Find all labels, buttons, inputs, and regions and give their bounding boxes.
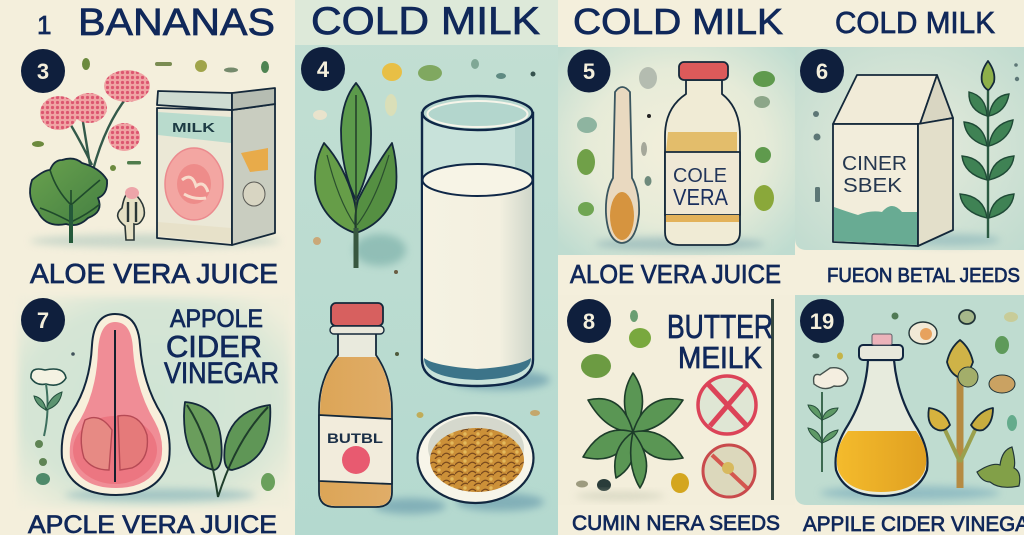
ground shadow	[820, 486, 1000, 500]
heading: cold milk column 3: COLD MILK	[573, 1, 783, 42]
icon: milk box: MILK	[172, 120, 216, 135]
heading: cold milk centre: COLD MILK	[311, 0, 540, 43]
icon: scattered specks	[32, 58, 269, 171]
panel: guava and leaves	[31, 314, 275, 501]
panel: herb and prohibition signs	[575, 299, 773, 500]
panel backdrop: apple cider lower left	[18, 297, 290, 507]
icon: vinegar flask	[836, 334, 928, 496]
badge: 19	[800, 299, 844, 343]
heading: apple cider vinegar: CIDER	[166, 329, 262, 364]
heading: bananas: 1	[37, 10, 51, 40]
icon: wooden spoon	[606, 87, 639, 243]
icon: scattered specks	[313, 59, 540, 418]
badge: 4	[301, 47, 345, 91]
badge: 3: 3	[37, 59, 49, 84]
heading: butter milk	[667, 308, 773, 375]
panel: milk carton and plant	[813, 61, 1019, 246]
icon: specks	[575, 310, 689, 500]
icon: milk carton: SBEK	[843, 175, 903, 197]
caption: cumin nera seeds: CUMIN NERA SEEDS	[572, 512, 780, 535]
panel backdrop: flask lower right	[795, 295, 1024, 505]
ground shadow	[30, 234, 280, 248]
panel backdrop: column 3 top	[558, 47, 795, 255]
badge: 7: 7	[37, 308, 49, 333]
icon: aloe bottle: COLE	[673, 165, 727, 187]
panel: spoon and aloe bottle	[577, 62, 775, 251]
badge: 6: 6	[816, 59, 828, 84]
ground shadow	[595, 237, 765, 251]
icon: small white flower sprig	[31, 369, 66, 436]
badge: 6	[800, 49, 844, 93]
heading: apple cider vinegar	[164, 305, 279, 390]
heading: bananas: BANANAS	[78, 2, 275, 44]
badge: 8	[567, 299, 611, 343]
icon: specks	[35, 352, 275, 491]
badge: 8: 8	[583, 309, 595, 334]
heading: cold milk column 4: COLD MILK	[835, 5, 995, 40]
divider line	[771, 299, 774, 500]
icon: flower plant	[30, 70, 150, 243]
icon: aloe bottle: VERA	[673, 184, 729, 210]
panel backdrop: centre column	[295, 0, 558, 535]
icon: six-leaf herb	[583, 373, 683, 488]
icon: prohibition sign	[698, 376, 756, 434]
badge: 5: 5	[583, 59, 595, 84]
icon: herb sprigs	[577, 67, 775, 216]
heading: butter milk: MEILK	[678, 340, 762, 375]
panel: flowers and milk box	[30, 58, 280, 248]
badge: 19: 19	[810, 309, 834, 334]
icon: herb sprig left	[808, 368, 848, 472]
badge: 4: 4	[317, 57, 330, 82]
panel backdrop: column 4 top	[795, 47, 1024, 250]
icon: small mushroom	[118, 187, 144, 240]
caption: aloe vera juice column 3: ALOE VERA JUICE	[570, 259, 781, 289]
icon: crossed spice sign	[703, 445, 755, 497]
icon: twin leaves	[184, 402, 270, 497]
icon: seeds and herbs	[812, 310, 1020, 487]
heading: apple cider vinegar: VINEGAR	[164, 357, 279, 390]
icon: aloe bottle	[665, 62, 740, 245]
icon: bowl of seeds	[418, 413, 544, 511]
icon: guava cut fruit	[62, 314, 170, 495]
caption: aloe vera juice: ALOE VERA JUICE	[30, 258, 278, 289]
icon: juice bottle	[319, 303, 446, 514]
icon: glass of milk	[422, 96, 550, 390]
icon: milk carton	[833, 75, 953, 246]
badge: 7	[21, 298, 65, 342]
heading: butter milk: BUTTER	[667, 308, 773, 345]
icon: green leaf	[315, 83, 406, 268]
panel: flask and herbs	[808, 310, 1020, 500]
icon: scattered specks	[813, 63, 1019, 202]
ground shadow	[65, 489, 255, 501]
badge: 3	[21, 49, 65, 93]
panel edge: cream column 3 bottom	[558, 295, 795, 505]
ground shadow	[900, 234, 1000, 246]
icon: leafy plant	[960, 61, 1014, 238]
icon: juice bottle: BUTBL	[327, 430, 384, 446]
panel: centre column illustrations	[313, 59, 550, 514]
badge: 5	[568, 50, 610, 92]
icon: milk carton: CINER	[842, 153, 907, 175]
heading: apple cider vinegar: APPOLE	[170, 305, 263, 333]
icon: milk box	[157, 88, 275, 245]
icon: yellow pod plant	[928, 340, 993, 488]
